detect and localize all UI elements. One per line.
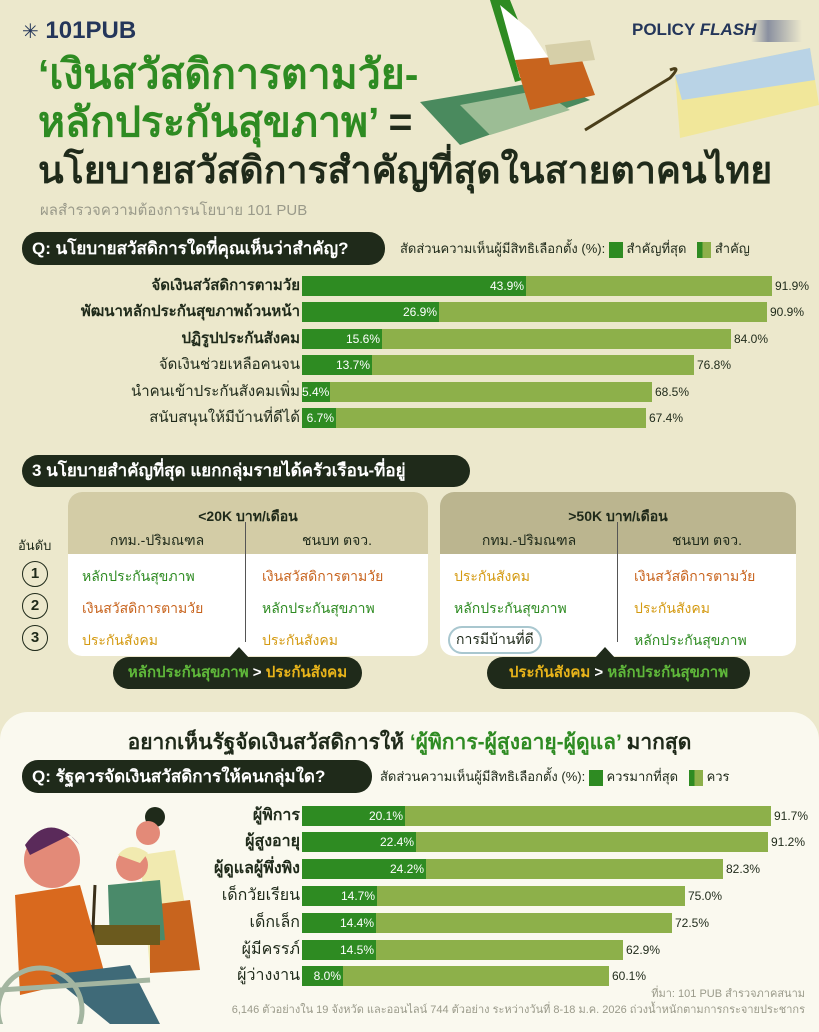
chart 2: target groups: ผู้มีครรภ์ [242,941,300,958]
chart 2: target groups: 82.3% [726,862,760,876]
question pill 2 [22,760,372,793]
panel: under 20K: ชนบท ตจว. [302,532,372,548]
chart 1: important policies: 13.7% [336,358,370,372]
rank labels: อันดับ [18,538,51,553]
chart 2: target groups: 8.0% [314,969,341,983]
callout right [487,657,750,689]
source note: 6,146 ตัวอย่างใน 19 จังหวัด และออนไลน์ 744 ตัวอย่าง ระหว่างวันที่ 8-18 ม.ค. 2026 ถ่วงน้ำหนักตามการกระจายประชากร [232,1004,805,1016]
title: นโยบายสวัสดิการสำคัญที่สุดในสายตาคนไทย [38,149,772,191]
chart 2: target groups: 75.0% [688,889,722,903]
title: หลักประกันสุขภาพ’ = [38,99,412,145]
chart 1: important policies: 67.4% [649,411,683,425]
panel: over 50K: >50K บาท/เดือน [568,508,668,524]
chart 1: important policies: จัดเงินช่วยเหลือคนจน [159,356,300,373]
policy flash label: POLICY FLASH [632,20,756,39]
chart 1: important policies [80,276,809,428]
title: ‘เงินสวัสดิการตามวัย- [38,51,418,97]
subtitle: ผลสำรวจความต้องการนโยบาย 101 PUB [40,202,307,219]
chart 2: target groups: 72.5% [675,916,709,930]
chart 2: target groups: ผู้พิการ [253,807,300,824]
panel: over 50K [440,492,796,656]
panel: under 20K: หลักประกันสุขภาพ [82,568,195,584]
chart 2: target groups: ผู้ดูแลผู้พึ่งพิง [214,860,300,877]
panel: over 50K: หลักประกันสุขภาพ [634,632,747,648]
callout right: ประกันสังคม > หลักประกันสุขภาพ [509,664,728,681]
chart 2: target groups: เด็กวัยเรียน [222,887,300,904]
legend 2: สัดส่วนความเห็นผู้มีสิทธิเลือกตั้ง (%): ควรมากที่สุด ควร [380,769,730,784]
panel: under 20K: เงินสวัสดิการตามวัย [262,568,383,584]
chart 2: target groups: 14.4% [340,916,374,930]
panel: over 50K: การมีบ้านที่ดี [456,631,534,647]
panel: over 50K: กทม.-ปริมณฑล [482,532,576,548]
question pill 1 [22,232,385,265]
chart 1: important policies: 91.9% [775,279,809,293]
question pill 1: Q: นโยบายสวัสดิการใดที่คุณเห็นว่าสำคัญ? [32,239,349,258]
bottom panel [0,712,819,1032]
chart 2: target groups: ผู้สูงอายุ [245,833,300,850]
chart 2: target groups: 60.1% [612,969,646,983]
chart 1: important policies: 26.9% [403,305,437,319]
chart 1: important policies: 84.0% [734,332,768,346]
chart 2: target groups: 22.4% [380,835,414,849]
chart 1: important policies: พัฒนาหลักประกันสุขภาพถ้วนหน้า [81,303,300,320]
section 2 heading [22,455,470,487]
rank labels [18,538,51,651]
panel: over 50K: ประกันสังคม [634,600,710,616]
chart 2: target groups: 91.7% [774,809,808,823]
chart 2: target groups [214,806,808,986]
panel: under 20K: หลักประกันสุขภาพ [262,600,375,616]
legend 1: สัดส่วนความเห็นผู้มีสิทธิเลือกตั้ง (%): สำคัญที่สุด สำคัญ [400,241,750,256]
source note: ที่มา: 101 PUB สำรวจภาคสนาม [651,988,805,1000]
chart 1: important policies: 5.4% [302,385,329,399]
logo: 101PUB: ✳ 101PUB [22,17,136,44]
chart 1: important policies: จัดเงินสวัสดิการตามวัย [151,277,300,294]
source note [232,986,805,1016]
panel: over 50K: ประกันสังคม [454,568,530,584]
rank labels: 2 [31,597,39,614]
chart 2: target groups: 62.9% [626,943,660,957]
chart 1: important policies: 90.9% [770,305,804,319]
callout left: หลักประกันสุขภาพ > ประกันสังคม [128,664,347,681]
illustration: people with wheelchair [0,807,200,1024]
chart 2: target groups: เด็กเล็ก [249,914,300,931]
panel: under 20K: ประกันสังคม [82,632,158,648]
chart 1: important policies: สนับสนุนให้มีบ้านที่ดีได้ [149,409,300,426]
section 2 heading: 3 นโยบายสำคัญที่สุด แยกกลุ่มรายได้ครัวเรือน-ที่อยู่ [32,461,406,480]
chart 1: important policies: นำคนเข้าประกันสังคมเพิ่ม [131,383,300,400]
chart 1: important policies: 6.7% [307,411,334,425]
title [38,51,772,194]
chart 1: important policies: 15.6% [346,332,380,346]
chart 2: target groups: 14.7% [341,889,375,903]
panel: under 20K: ประกันสังคม [262,632,338,648]
panel: under 20K: กทม.-ปริมณฑล [110,532,204,548]
panel: under 20K [68,492,428,656]
panel: over 50K: ชนบท ตจว. [672,532,742,548]
chart 2: target groups: 14.5% [340,943,374,957]
chart 1: important policies: ปฏิรูปประกันสังคม [181,330,300,347]
callout left [113,657,362,689]
chart 2: target groups: 91.2% [771,835,805,849]
chart 1: important policies: 76.8% [697,358,731,372]
panel: under 20K: เงินสวัสดิการตามวัย [82,600,203,616]
panel: under 20K: <20K บาท/เดือน [198,508,298,524]
chart 2: target groups: 20.1% [369,809,403,823]
rank labels: 1 [31,565,39,582]
policy flash label [632,20,802,42]
chart 2: target groups: 24.2% [390,862,424,876]
panel: over 50K: เงินสวัสดิการตามวัย [634,568,755,584]
rank labels: 3 [31,629,39,646]
chart 2: target groups: ผู้ว่างงาน [237,967,300,984]
question pill 2: Q: รัฐควรจัดเงินสวัสดิการให้คนกลุ่มใด? [32,767,325,786]
panel: over 50K: หลักประกันสุขภาพ [454,600,567,616]
chart 1: important policies: 43.9% [490,279,524,293]
header illustration [420,0,819,145]
heading: อยากเห็นรัฐจัดเงินสวัสดิการให้ ‘ผู้พิการ-ผู้สูงอายุ-ผู้ดูแล’ มากสุด [128,731,691,754]
chart 1: important policies: 68.5% [655,385,689,399]
